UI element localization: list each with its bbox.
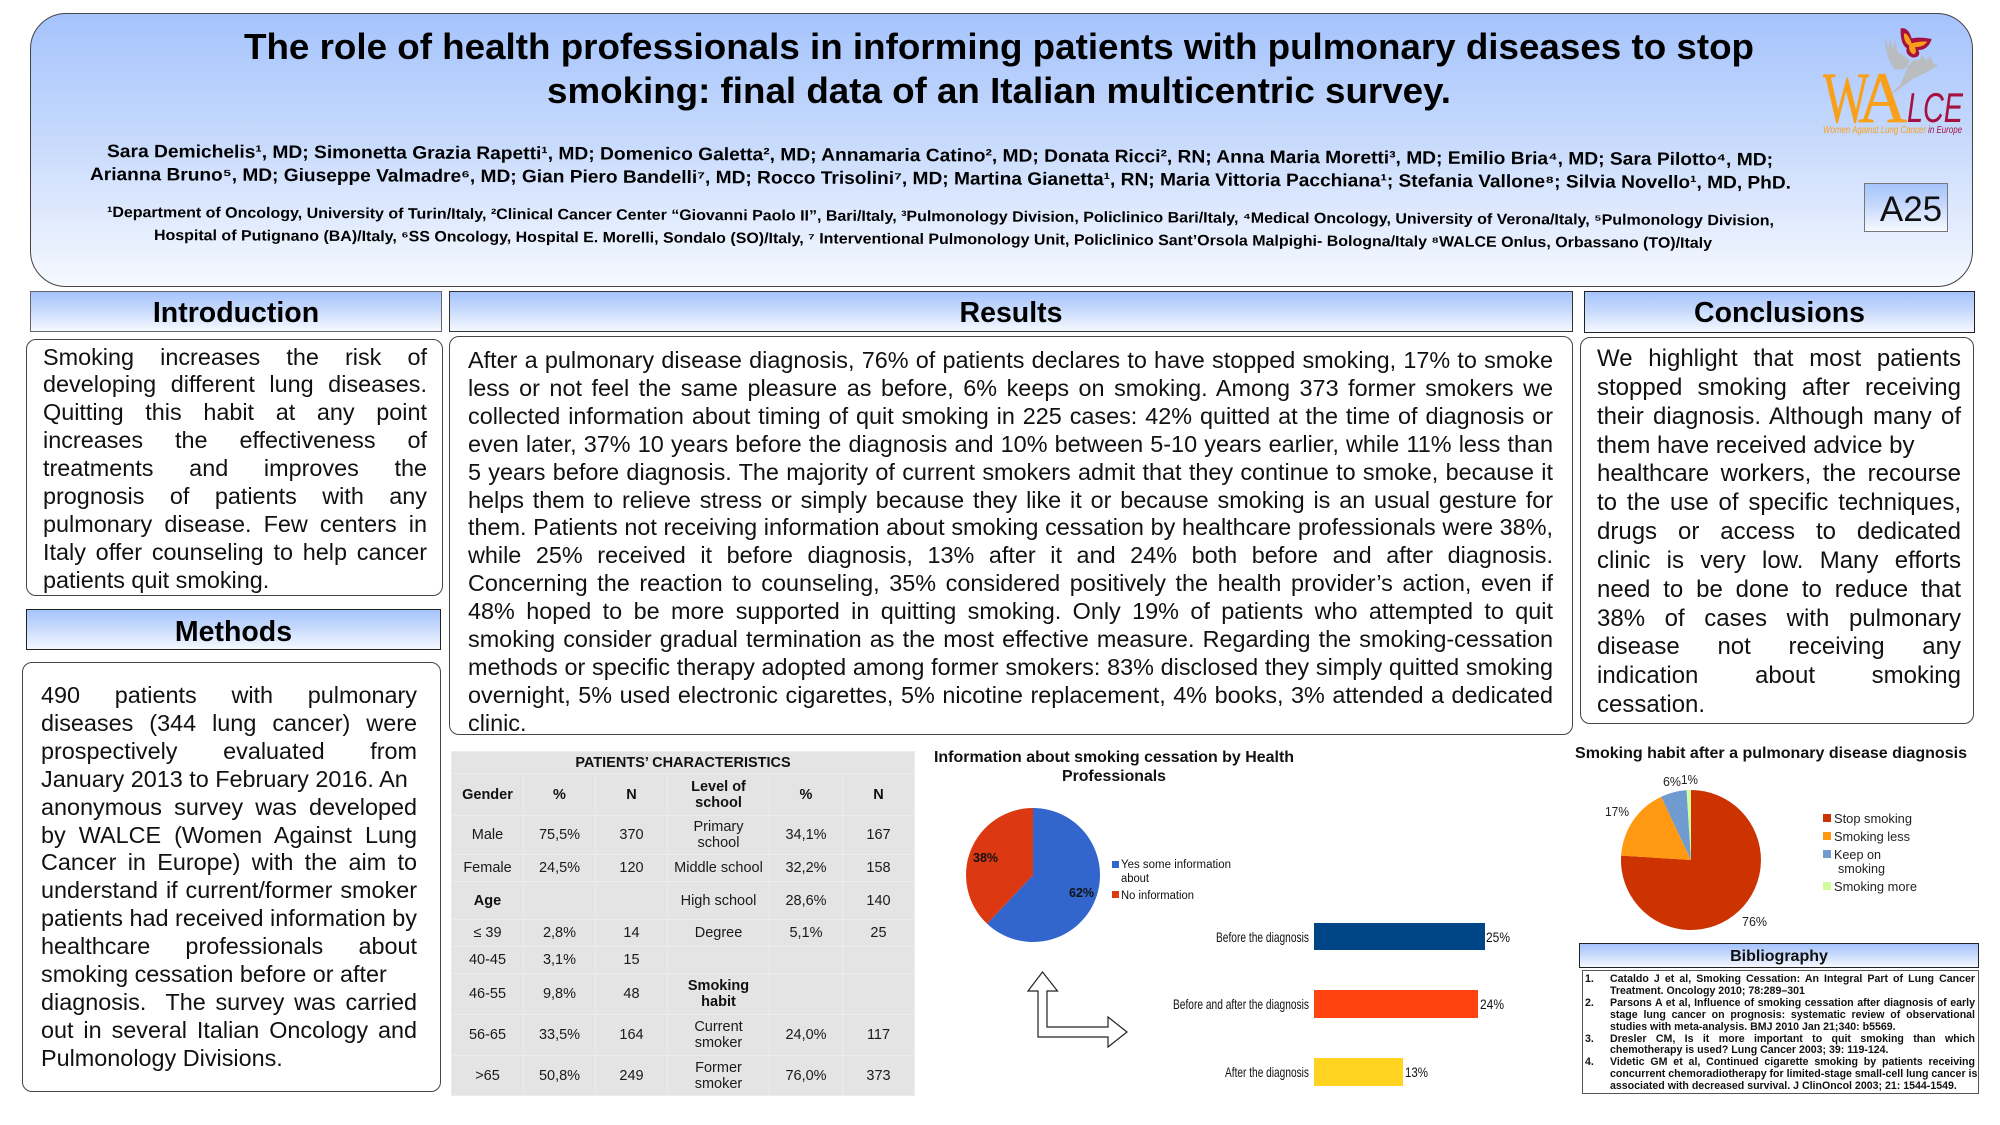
table: patients' characteristics: Primary [694, 819, 743, 835]
conclusions body text: their diagnosis. Although many of [1597, 403, 1961, 430]
conclusions body text: clinic is very low. Many efforts [1597, 547, 1961, 574]
affiliations [107, 204, 1774, 252]
panel: methods text [22, 662, 441, 1092]
table: patients' characteristics: 14 [623, 925, 640, 941]
table: patients' characteristics: 117 [867, 1027, 890, 1043]
table: patients' characteristics: Female [463, 860, 512, 876]
methods body text: by WALCE (Women Against Lung [41, 822, 417, 848]
table: patients' characteristics: 50,8% [539, 1068, 580, 1084]
results body text: 5 years before diagnosis. The majority of current smokers admit that they continue to smoke, because it [468, 459, 1553, 485]
table: patients' characteristics: 3,1% [543, 952, 576, 968]
chart: information pie: about [1121, 873, 1150, 885]
reference list [1610, 973, 1977, 1092]
reference numbers: 2. [1585, 997, 1594, 1009]
authors: Arianna Bruno⁵, MD; Giuseppe Valmadre⁶, MD; Gian Piero Bandelli⁷, MD; Rocco Trisolini⁷, MD; Martina Gianetta¹, RN; Maria Vittoria Pacchiana¹; Stefania Vallone⁸; Silvia Novello¹, MD, PhD. [90, 164, 1791, 193]
conclusions body text: them have received advice by [1597, 432, 1915, 459]
reference numbers [1585, 973, 1594, 1068]
table: patients' characteristics: 32,2% [785, 860, 827, 876]
reference list: Cataldo J et al, Smoking Cessation: An Integral Part of Lung Cancer [1610, 973, 1975, 985]
table: patients' characteristics: 75,5% [539, 827, 580, 843]
table: patients' characteristics: N [626, 786, 637, 802]
introduction body text: increases the effectiveness of [43, 427, 427, 453]
table: patients' characteristics: >65 [475, 1068, 500, 1084]
affiliations: ¹Department of Oncology, University of Turin/Italy, ²Clinical Cancer Center “Giovanni Paolo II”, Bari/Italy, ³Pulmonology Division, Policlinico Bari/Italy, ⁴Medical Oncology, University of Verona/Italy, ⁵Pulmonology Division, [107, 204, 1774, 229]
methods body text: understand if current/former smoker [41, 877, 417, 903]
results body text: collected information about timing of quit smoking in 225 cases: 42% quitted at the time of diagnosis or [468, 403, 1553, 429]
conclusions body text: cessation. [1597, 691, 1705, 718]
results body text: clinic. [468, 710, 526, 736]
methods body text: patients had received information by [41, 905, 417, 931]
methods body text: Cancer in Europe) with the aim to [41, 849, 417, 875]
chart: timing bar chart: After the diagnosis [1225, 1064, 1309, 1080]
panel: bibliography [1582, 970, 1979, 1094]
introduction body text: prognosis of patients with any [43, 483, 427, 509]
heading: Methods: Methods [175, 616, 292, 648]
authors: Sara Demichelis¹, MD; Simonetta Grazia Rapetti¹, MD; Domenico Galetta², MD; Annamaria Catino², MD; Donata Ricci², RN; Anna Maria Moretti³, MD; Emilio Bria⁴, MD; Sara Pilotto⁴, MD; [107, 141, 1773, 169]
table: patients' characteristics: 48 [623, 986, 640, 1002]
conclusions body text: drugs or access to dedicated [1597, 518, 1961, 545]
logo: WALCE [1822, 28, 1964, 138]
table: patients' characteristics: % [553, 786, 566, 802]
chart: information pie: Yes some information [1121, 859, 1231, 871]
introduction body text: Quitting this habit at any point [43, 399, 427, 425]
introduction body text: Italy offer counseling to help cancer [43, 539, 427, 565]
conclusions body text: to the use of specific techniques, [1597, 489, 1961, 516]
table: patients' characteristics: 33,5% [539, 1027, 580, 1043]
reference list: Dresler CM, Is it more important to quit smoking than which [1610, 1033, 1975, 1045]
results body text: Concerning the reaction to counseling, 35% considered positively the health provider’s action, even if [468, 570, 1553, 596]
results body text: smoking consider gradual termination as the most effective measure. Regarding the smoking-cessation [468, 626, 1553, 652]
heading: Results [449, 291, 1573, 332]
table: patients' characteristics: 5,1% [789, 925, 823, 941]
results body text: 48% hoped to be more supported in quitting smoking. Only 19% of patients who attempted to quit [468, 598, 1553, 624]
abstract number box [1864, 183, 1948, 232]
heading: Bibliography: Bibliography [1730, 948, 1828, 965]
methods body text: prospectively evaluated from [41, 738, 417, 764]
chart: timing bar chart: 25% [1486, 929, 1510, 945]
chart: information pie: Information about smoking cessation by Health [934, 749, 1294, 766]
chart: timing bar chart: 13% [1405, 1064, 1428, 1080]
methods body text: healthcare professionals about [41, 933, 417, 959]
table: patients' characteristics: 25 [870, 925, 887, 941]
panel: conclusions text [1580, 337, 1974, 724]
methods body text [41, 682, 417, 1071]
logo: WALCE: A [1858, 58, 1907, 138]
table: patients' characteristics: Former [695, 1060, 742, 1076]
table: patients' characteristics: 28,6% [785, 892, 827, 908]
affiliations: Hospital of Putignano (BA)/Italy, ⁶SS Oncology, Hospital E. Morelli, Sondalo (SO)/Italy, ⁷ Interventional Pulmonology Unit, Policlinico Sant’Orsola Malpighi- Bologna/Italy ⁸WALCE Onlus, Orbassano (TO)/Italy [154, 227, 1713, 252]
reference list: studies with meta-analysis. BMJ 2010 Jan 21;340: b5569. [1610, 1021, 1896, 1033]
table: patients' characteristics: Current [694, 1019, 743, 1035]
table: patients' characteristics: school [695, 794, 742, 810]
abstract number box: A25 [1880, 190, 1942, 229]
table: patients' characteristics: Level of [691, 778, 746, 794]
reference list: concurrent chemoradiotherapy for limited-stage small-cell lung cancer is [1610, 1068, 1977, 1080]
chart: smoking habit pie: 76% [1742, 914, 1767, 929]
table: patients' characteristics: 15 [623, 952, 640, 968]
heading: Methods [26, 609, 441, 650]
table: patients' characteristics [451, 751, 915, 1096]
header band [30, 13, 1973, 287]
chart: smoking habit pie: smoking [1838, 861, 1885, 876]
chart: information pie: No information [1121, 890, 1194, 902]
table: patients' characteristics: school [698, 835, 739, 851]
conclusions body text: indication about smoking [1597, 662, 1961, 689]
logo: WALCE: W [1823, 58, 1869, 138]
table: patients' characteristics: Degree [695, 925, 742, 941]
reference list: Treatment. Oncology 2010; 78:289–301 [1610, 985, 1805, 997]
conclusions body text: healthcare workers, the recourse [1597, 460, 1961, 487]
table: patients' characteristics: 24,0% [785, 1027, 827, 1043]
results body text: overnight, 5% used electronic cigarettes, 5% nicotine replacement, 4% books, 3% attended a dedicated [468, 682, 1553, 708]
table: patients' characteristics: 34,1% [785, 827, 827, 843]
introduction body text: Smoking increases the risk of [43, 344, 427, 370]
methods body text: Pulmonology Divisions. [41, 1045, 283, 1071]
chart: smoking habit pie: 6% [1663, 774, 1681, 789]
reference list: chemotherapy is used? Lung Cancer 2003; 39: 119-124. [1610, 1044, 1888, 1056]
reference numbers: 1. [1585, 973, 1594, 985]
table: patients' characteristics: ≤ 39 [473, 925, 502, 941]
heading: Introduction: Introduction [153, 297, 319, 329]
chart: smoking habit pie: Stop smoking [1834, 811, 1912, 826]
chart: timing bar chart: Before the diagnosis [1216, 929, 1309, 945]
table: patients' characteristics: High school [681, 892, 756, 908]
table: patients' characteristics: 120 [619, 860, 644, 876]
results body text: while 25% received it before diagnosis, 13% after it and 24% both before and after diagnosis. [468, 542, 1553, 568]
table: patients' characteristics: 164 [619, 1027, 644, 1043]
conclusions body text: stopped smoking after receiving [1597, 374, 1961, 401]
table: patients' characteristics: 9,8% [543, 986, 576, 1002]
heading: Conclusions [1584, 291, 1975, 333]
heading: Conclusions: Conclusions [1694, 297, 1865, 329]
table: patients' characteristics: 140 [866, 892, 891, 908]
results body text: even later, 37% 10 years before the diagnosis and 10% between 5-10 years earlier, while 11% less than [468, 431, 1553, 457]
methods body text: January 2013 to February 2016. An [41, 766, 408, 792]
table: patients' characteristics: N [873, 786, 884, 802]
chart: timing bar chart: 24% [1480, 996, 1504, 1012]
panel: introduction text [26, 339, 443, 596]
conclusions body text: 38% of cases with pulmonary [1597, 605, 1961, 632]
methods body text: anonymous survey was developed [41, 794, 417, 820]
reference numbers: 4. [1585, 1056, 1594, 1068]
introduction body text: treatments and improves the [43, 455, 427, 481]
introduction body text [43, 344, 428, 593]
table: patients' characteristics: 373 [866, 1068, 891, 1084]
chart: smoking habit pie: Smoking less [1834, 829, 1910, 844]
table: patients' characteristics: 40-45 [469, 952, 506, 968]
results body text: After a pulmonary disease diagnosis, 76% of patients declares to have stopped smoking, 17% to smoke [468, 347, 1553, 373]
results body text: methods or specific therapy adopted among former smokers: 83% disclosed they simply quitted smoking [468, 654, 1553, 680]
methods body text: out in several Italian Oncology and [41, 1017, 417, 1043]
table: patients' characteristics: Gender [462, 786, 513, 802]
table: patients' characteristics: % [800, 786, 812, 802]
table: patients' characteristics: PATIENTS’ CHARACTERISTICS [575, 754, 791, 770]
methods body text: smoking cessation before or after [41, 961, 387, 987]
chart: smoking habit pie: Keep on [1834, 847, 1881, 862]
table: patients' characteristics: Male [472, 827, 503, 843]
table: patients' characteristics: 56-65 [469, 1027, 506, 1043]
reference numbers: 3. [1585, 1033, 1594, 1045]
table: patients' characteristics: 167 [866, 827, 891, 843]
introduction body text: pulmonary disease. Few centers in [43, 511, 427, 537]
methods body text: diagnosis. The survey was carried [41, 989, 417, 1015]
table: patients' characteristics: habit [701, 994, 736, 1010]
conclusions body text: disease not receiving any [1597, 633, 1961, 660]
table: patients' characteristics: 158 [866, 860, 891, 876]
table: patients' characteristics: Smoking [688, 978, 749, 994]
chart: smoking habit pie: Smoking more [1834, 879, 1917, 894]
introduction body text: patients quit smoking. [43, 567, 269, 593]
panel: results text [449, 336, 1573, 735]
reference list: stage lung cancer on prognosis: systematic review of observational [1610, 1009, 1975, 1021]
table: patients' characteristics: 76,0% [785, 1068, 827, 1084]
heading: Introduction [30, 291, 442, 332]
chart: information pie: 38% [973, 850, 998, 865]
title [244, 26, 1754, 111]
table: patients' characteristics: 46-55 [469, 986, 506, 1002]
reference list: Videtic GM et al, Continued cigarette smoking by patients receiving [1610, 1056, 1975, 1068]
table: patients' characteristics: smoker [695, 1076, 742, 1092]
table: patients' characteristics: Age [474, 892, 501, 908]
table: patients' characteristics: Middle school [674, 860, 763, 876]
chart: smoking habit pie: 17% [1605, 804, 1629, 819]
table: patients' characteristics: 249 [619, 1068, 644, 1084]
logo: WALCE: Women Against Lung Cancer in Europe [1823, 124, 1962, 136]
logo: WALCE: LCE [1907, 84, 1964, 131]
reference list: Parsons A et al, Influence of smoking cessation after diagnosis of early [1610, 997, 1975, 1009]
introduction body text: developing different lung diseases. [43, 371, 427, 397]
chart: timing bar chart: Before and after the diagnosis [1173, 996, 1309, 1012]
title: The role of health professionals in informing patients with pulmonary diseases to stop [244, 26, 1754, 67]
table: patients' characteristics: 24,5% [539, 860, 580, 876]
results body text: less or not feel the same pleasure as before, 6% keeps on smoking. Among 373 former smokers we [468, 375, 1553, 401]
table: patients' characteristics: 370 [619, 827, 644, 843]
chart: smoking habit pie: Smoking habit after a pulmonary disease diagnosis [1575, 745, 1967, 762]
heading: Results: Results [960, 297, 1062, 329]
results body text: helps them to relieve stress or simply because they like it or because smoking is an usual gesture for [468, 487, 1553, 513]
conclusions body text: need to be done to reduce that [1597, 576, 1961, 603]
table: patients' characteristics: smoker [695, 1035, 742, 1051]
reference list: associated with decreased survival. J ClinOncol 2003; 21: 1544-1549. [1610, 1080, 1957, 1092]
results body text: them. Patients not receiving information about smoking cessation by healthcare professionals were 38%, [468, 514, 1553, 540]
methods body text: diseases (344 lung cancer) were [41, 710, 417, 736]
conclusions body text [1597, 345, 1962, 718]
results body text [468, 347, 1554, 736]
chart: smoking habit pie: 1% [1681, 772, 1698, 787]
chart: information pie: Professionals [1062, 768, 1166, 785]
title: smoking: final data of an Italian multicentric survey. [547, 70, 1451, 111]
heading: Bibliography [1579, 943, 1979, 968]
conclusions body text: We highlight that most patients [1597, 345, 1961, 372]
chart: information pie: 62% [1069, 885, 1094, 900]
table: patients' characteristics: 2,8% [543, 925, 576, 941]
methods body text: 490 patients with pulmonary [41, 682, 417, 708]
authors [90, 141, 1791, 193]
